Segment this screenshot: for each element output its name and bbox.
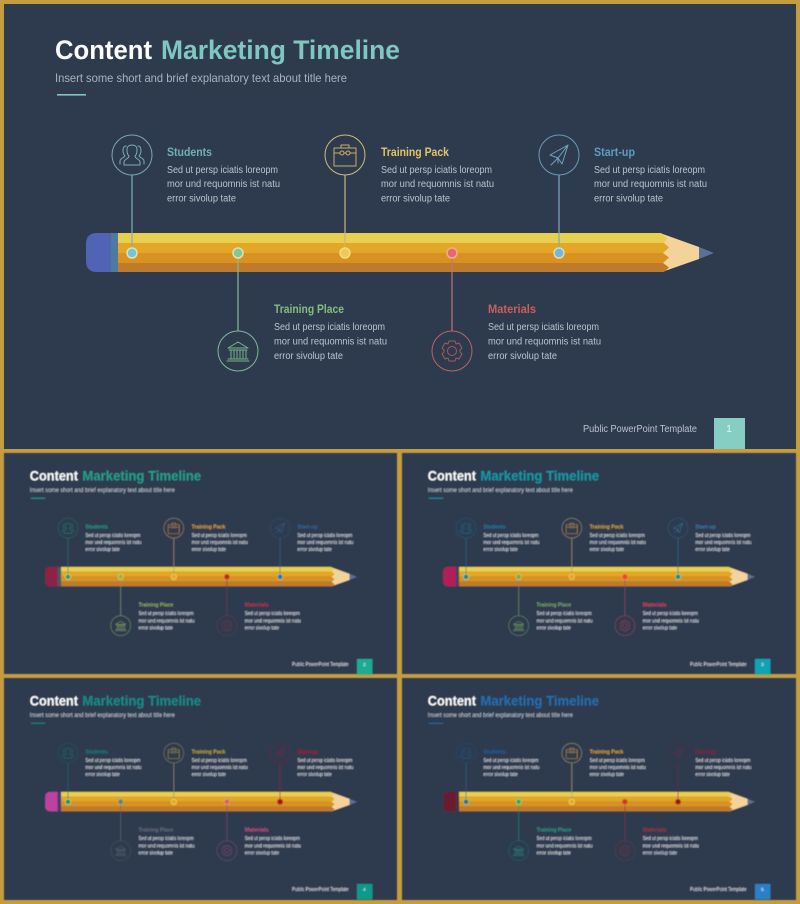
slide 3 subtitle: Insert some short and brief explanatory text about title here (428, 488, 573, 494)
slide 3 Materials: error sivolup tate (643, 626, 677, 632)
slide 2 Training Place: Training Place (139, 603, 173, 609)
slide 4 title underline (31, 722, 45, 725)
slide 2 Materials: error sivolup tate (245, 626, 279, 632)
milestone: Start-up: Sed ut persp iciatis loreopm (594, 165, 705, 176)
slide 3 Training Pack: Sed ut persp iciatis loreopm (590, 533, 645, 539)
slide 3 Training Pack (562, 518, 646, 580)
slide 3 footer: Public PowerPoint Template (690, 662, 747, 668)
milestone: Training Place: error sivolup tate (274, 351, 343, 362)
milestone: Training Place: Sed ut persp iciatis loreopm (274, 322, 385, 333)
slide 2 Start-up: Sed ut persp iciatis loreopm (297, 533, 353, 539)
slide 2 Students: error sivolup tate (85, 547, 120, 553)
slide 2 title underline (31, 497, 45, 500)
slide 5 title: Marketing Timeline (480, 693, 599, 708)
slide 3 page number box: 3 (761, 662, 764, 668)
slide 5 Materials: error sivolup tate (643, 851, 677, 857)
slide 4 Training Pack: mor und requomnis ist natu (192, 765, 248, 771)
slide 3 Students: mor und requomnis ist natu (483, 540, 540, 546)
milestone: Students (112, 135, 280, 258)
slide 3 Start-up: Sed ut persp iciatis loreopm (695, 533, 751, 539)
slide 5 Start-up: error sivolup tate (695, 772, 730, 778)
slide 2 Start-up (270, 518, 354, 580)
milestone: Start-up (539, 135, 707, 258)
slide 1 page number box: 1 (726, 424, 732, 435)
slide 4 Materials (217, 799, 301, 861)
slide 3 Start-up: error sivolup tate (695, 547, 730, 553)
slide 5 Start-up (668, 743, 752, 805)
slide 4 Training Pack: Training Pack (192, 750, 226, 756)
slide 5 content (428, 693, 770, 899)
slide 5 Students: Sed ut persp iciatis loreopm (483, 758, 539, 764)
slide 4 footer: Public PowerPoint Template (292, 887, 349, 893)
slide 5 title: Content (428, 693, 476, 708)
slide 5 subtitle: Insert some short and brief explanatory text about title here (428, 713, 573, 719)
slide 1 title: Marketing Timeline (161, 35, 400, 65)
milestone: Start-up: Start-up (594, 147, 635, 159)
slide 4 Training Place: error sivolup tate (139, 851, 173, 857)
milestone: Materials: Sed ut persp iciatis loreopm (488, 322, 599, 333)
slide 4 title: Marketing Timeline (82, 693, 201, 708)
slide 2 Students: mor und requomnis ist natu (85, 540, 142, 546)
milestone: Training Pack (325, 135, 494, 258)
slide 2 Training Place: mor und requomnis ist natu (139, 618, 195, 624)
slide 1 title: Content (55, 35, 152, 65)
slide 3 title: Marketing Timeline (480, 468, 599, 483)
slide 2 content (30, 468, 372, 674)
slide 2 Materials: Materials (245, 603, 269, 609)
slide 1 title underline (57, 94, 86, 96)
milestone: Materials: mor und requomnis ist natu (488, 336, 601, 348)
slide 5 Materials: Sed ut persp iciatis loreopm (643, 836, 698, 842)
slide 5 Training Pack: Training Pack (590, 750, 624, 756)
slide 2 Materials: mor und requomnis ist natu (245, 618, 301, 624)
slide 5 Materials: mor und requomnis ist natu (643, 843, 699, 849)
pencil ferrule (111, 233, 118, 272)
slide 5 Training Pack: error sivolup tate (590, 772, 624, 778)
slide 2 Training Place: Sed ut persp iciatis loreopm (139, 611, 194, 617)
slide 3 Training Place: Training Place (537, 603, 571, 609)
slide 5 Materials (615, 799, 699, 861)
slide 2 page number box (357, 659, 372, 674)
milestone: Students: error sivolup tate (167, 194, 236, 204)
slide 2 Training Pack: Training Pack (192, 525, 226, 531)
slide 3 title: Content (428, 468, 476, 483)
slide 4 background (4, 678, 397, 900)
slide 4 Materials: mor und requomnis ist natu (245, 843, 301, 849)
slide 5 Students (456, 743, 540, 805)
slide 5 page number box: 5 (761, 887, 764, 893)
slide 2 title: Marketing Timeline (82, 468, 201, 483)
slide 4 Training Place: Training Place (139, 828, 173, 834)
slide 3 Students: Sed ut persp iciatis loreopm (483, 533, 539, 539)
slide 3 Training Pack: mor und requomnis ist natu (590, 540, 646, 546)
slide 4 Training Place: mor und requomnis ist natu (139, 843, 195, 849)
slide 5 Training Place (509, 799, 593, 861)
slide 3 page number box (755, 659, 770, 674)
slide 2 Start-up: Start-up (297, 525, 318, 531)
slide 5 title underline (429, 722, 443, 725)
slide 5 Training Place: error sivolup tate (537, 851, 571, 857)
milestone: Start-up: mor und requomnis ist natu (594, 179, 707, 190)
slide 5 Training Place: Training Place (537, 828, 571, 834)
slide 5 Training Pack: Sed ut persp iciatis loreopm (590, 758, 645, 764)
slide 2 background (4, 453, 397, 674)
slide 3 title underline (429, 497, 443, 500)
slide 4 subtitle: Insert some short and brief explanatory text about title here (30, 713, 175, 719)
slide 4 title: Content (30, 693, 78, 708)
slide 4 Training Pack: Sed ut persp iciatis loreopm (192, 758, 247, 764)
slide 5 Students: mor und requomnis ist natu (483, 765, 540, 771)
slide 3 Start-up: Start-up (695, 525, 716, 531)
slide 1 footer: Public PowerPoint Template (583, 424, 697, 435)
slide 3 Training Place (509, 574, 593, 636)
slide 4 title (30, 693, 201, 708)
slide 3 Materials: mor und requomnis ist natu (643, 618, 699, 624)
slide 4 page number box (357, 884, 372, 899)
slide 5 Materials: Materials (643, 828, 667, 834)
slide 5 background (402, 678, 796, 900)
milestone: Training Place: mor und requomnis ist natu (274, 336, 387, 348)
slide 4 Start-up: mor und requomnis ist natu (297, 765, 354, 771)
slide 4 Students: Sed ut persp iciatis loreopm (85, 758, 141, 764)
slide 1 page number box (714, 418, 745, 449)
slide 5 Start-up: Start-up (695, 750, 716, 756)
slide 4 Start-up: error sivolup tate (297, 772, 332, 778)
slide 5 Students: error sivolup tate (483, 772, 518, 778)
slide 4 Students: mor und requomnis ist natu (85, 765, 142, 771)
milestone: Materials: Materials (488, 304, 536, 316)
slide 3 content (428, 468, 770, 674)
panel: slide 2 (4, 453, 397, 674)
milestone: Materials: error sivolup tate (488, 351, 557, 362)
milestone: Training Pack: Sed ut persp iciatis loreopm (381, 165, 492, 176)
slide 4 Training Pack: error sivolup tate (192, 772, 226, 778)
slide 3 Training Pack: Training Pack (590, 525, 624, 531)
panel: slide 5 (402, 678, 796, 900)
slide 2 Training Pack: mor und requomnis ist natu (192, 540, 248, 546)
milestone: Start-up: error sivolup tate (594, 194, 663, 204)
slide 3 Start-up (668, 518, 752, 580)
panel: slide 3 (402, 453, 796, 674)
slide 5 Training Pack: mor und requomnis ist natu (590, 765, 646, 771)
slide 3 Materials (615, 574, 699, 636)
slide 2 Materials (217, 574, 301, 636)
slide 5 Start-up: mor und requomnis ist natu (695, 765, 752, 771)
milestone: Students: Students (167, 147, 212, 159)
slide 4 pencil (45, 792, 357, 811)
milestone: Training Pack: mor und requomnis ist natu (381, 179, 494, 190)
slide 2 Students: Sed ut persp iciatis loreopm (85, 533, 141, 539)
slide 4 Materials: Sed ut persp iciatis loreopm (245, 836, 300, 842)
slide 4 Start-up (270, 743, 354, 805)
slide 4 Training Place: Sed ut persp iciatis loreopm (139, 836, 194, 842)
slide 3 Students: Students (483, 525, 506, 531)
slide 3 Materials: Materials (643, 603, 667, 609)
slide 4 page number box: 4 (363, 887, 366, 893)
slide 5 title (428, 693, 599, 708)
slide 4 Students: error sivolup tate (85, 772, 120, 778)
slide 5 Start-up: Sed ut persp iciatis loreopm (695, 758, 751, 764)
slide 3 title (428, 468, 599, 483)
slide 4 Materials: error sivolup tate (245, 851, 279, 857)
slide 4 Training Pack (164, 743, 248, 805)
slide 2 Materials: Sed ut persp iciatis loreopm (245, 611, 300, 617)
slide 2 title: Content (30, 468, 78, 483)
milestone: Students: Sed ut persp iciatis loreopm (167, 165, 278, 176)
slide 5 Training Pack (562, 743, 646, 805)
slide 5 Training Place: Sed ut persp iciatis loreopm (537, 836, 592, 842)
slide 5 Students: Students (483, 750, 506, 756)
slide 2 pencil (45, 567, 357, 586)
slide 4 Training Place (111, 799, 195, 861)
milestone: Training Place (218, 248, 387, 371)
slide 5 Training Place: mor und requomnis ist natu (537, 843, 593, 849)
slide 3 background (402, 453, 796, 674)
slide 5 footer: Public PowerPoint Template (690, 887, 747, 893)
slide 4 Students: Students (85, 750, 108, 756)
slide 5 page number box (755, 884, 770, 899)
slide 4 content (30, 693, 372, 899)
pencil body (118, 233, 714, 272)
slide 1 subtitle: Insert some short and brief explanatory text about title here (55, 71, 347, 85)
slide 3 pencil (443, 567, 755, 586)
slide 2 Students (58, 518, 142, 580)
slide 2 Training Pack (164, 518, 248, 580)
slide 3 Training Place: error sivolup tate (537, 626, 571, 632)
slide 2 Students: Students (85, 525, 108, 531)
milestone: Training Pack: error sivolup tate (381, 194, 450, 204)
milestone: Materials (432, 248, 601, 371)
slide 4 Students (58, 743, 142, 805)
slide 3 Training Place: mor und requomnis ist natu (537, 618, 593, 624)
slide 4 Start-up: Sed ut persp iciatis loreopm (297, 758, 353, 764)
panel: slide 4 (4, 678, 397, 900)
milestone: Training Place: Training Place (274, 304, 344, 316)
slide 2 Training Place: error sivolup tate (139, 626, 173, 632)
slide 3 Students: error sivolup tate (483, 547, 518, 553)
slide 2 Training Pack: error sivolup tate (192, 547, 226, 553)
pencil eraser (86, 233, 111, 272)
slide 2 subtitle: Insert some short and brief explanatory text about title here (30, 488, 175, 494)
slide 3 Training Pack: error sivolup tate (590, 547, 624, 553)
milestone: Training Pack: Training Pack (381, 147, 450, 159)
slide 3 Training Place: Sed ut persp iciatis loreopm (537, 611, 592, 617)
slide 5 pencil (443, 792, 755, 811)
slide 2 title (30, 468, 201, 483)
slide 2 Start-up: mor und requomnis ist natu (297, 540, 354, 546)
slide 1 title (55, 35, 400, 65)
slide 1 background (4, 4, 796, 449)
slide 2 footer: Public PowerPoint Template (292, 662, 349, 668)
slide 4 Start-up: Start-up (297, 750, 318, 756)
slide 2 page number box: 2 (363, 662, 366, 668)
slide 2 Training Pack: Sed ut persp iciatis loreopm (192, 533, 247, 539)
milestone: Students: mor und requomnis ist natu (167, 179, 280, 190)
slide 2 Start-up: error sivolup tate (297, 547, 332, 553)
slide 3 Students (456, 518, 540, 580)
slide 4 Materials: Materials (245, 828, 269, 834)
slide 2 Training Place (111, 574, 195, 636)
slide 3 Materials: Sed ut persp iciatis loreopm (643, 611, 698, 617)
slide 3 Start-up: mor und requomnis ist natu (695, 540, 752, 546)
panel: main slide 1 (4, 4, 796, 449)
